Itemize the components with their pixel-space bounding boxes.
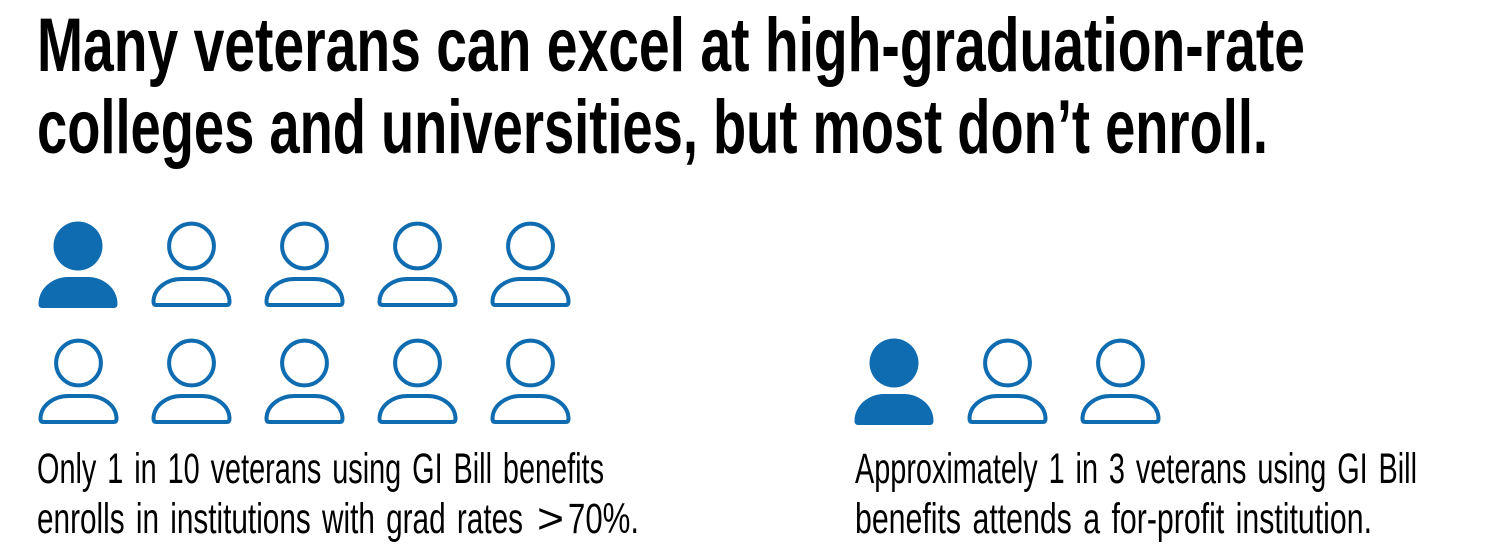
caption: 1 in 10 veterans [37,446,639,543]
caption: 1 in 3 veterans [855,446,1417,543]
icon group: 1 in 10 veterans [38,222,568,422]
title [37,3,1305,170]
caption: 1 in 10 veterans: 70%. [568,496,639,543]
caption: 1 in 10 veterans: Only 1 in 10 veterans using GI Bill benefits [37,446,604,493]
caption: 1 in 10 veterans: > [537,496,564,543]
caption: 1 in 10 veterans: enrolls in institutions with grad rates [37,496,523,543]
icon group: 1 in 3 veterans [854,338,1158,425]
